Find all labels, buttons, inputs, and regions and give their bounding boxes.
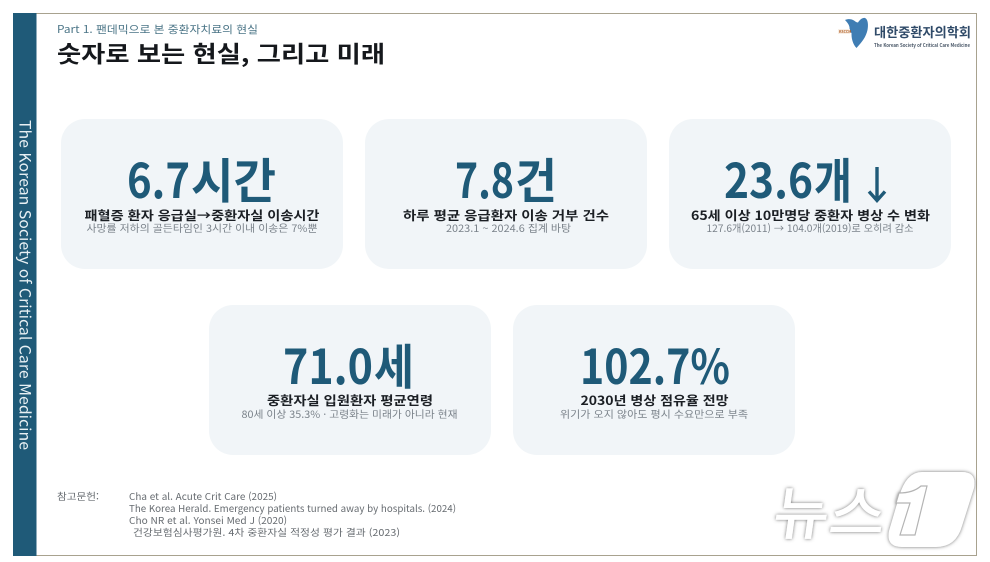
stat note: 사망률 저하의 골든타임인 3시간 이내 이송은 7%뿐 — [86, 220, 318, 235]
stat label: 65세 이상 10만명당 중환자 병상 수 변화 — [691, 205, 931, 224]
reference list: Cha et al. Acute Crit Care (2025) — [129, 489, 277, 503]
watermark text: 뉴스 — [769, 466, 893, 551]
panel: stat card 102.7% — [513, 305, 795, 455]
stat label: 2030년 병상 점유율 전망 — [580, 390, 729, 409]
panel: stat card 71.0세 — [209, 305, 491, 455]
watermark: News1 — [769, 466, 974, 551]
side bar title: The Korean Society of Critical Care Medicine — [14, 120, 36, 450]
stat label: 중환자실 입원환자 평균연령 — [267, 390, 433, 409]
reference list: The Korea Herald. Emergency patients turned away by hospitals. (2024) — [129, 501, 456, 515]
panel: stat card 7.8건 — [365, 119, 647, 269]
stat number: 6.7 — [127, 142, 190, 212]
stat note: 127.6개(2011) → 104.0개(2019)로 오히려 감소 — [706, 220, 914, 235]
stat number: 71.0 — [283, 328, 373, 398]
reference list: 건강보험심사평가원. 4차 중환자실 적정성 평가 결과 (2023) — [133, 525, 400, 539]
logo name: 대한중환자의학회 — [874, 22, 971, 41]
stat number: 세 — [374, 328, 414, 398]
stat label: 하루 평균 응급환자 이송 거부 건수 — [403, 205, 609, 224]
stat label: 패혈증 환자 응급실→중환자실 이송시간 — [84, 205, 320, 224]
panel: side bar — [13, 13, 36, 556]
logo: Korean Society of Critical Care Medicine — [838, 18, 971, 49]
stat number: 23.6 — [724, 142, 813, 212]
section label: Part 1. 팬데믹으로 본 중환자치료의 현실 — [57, 22, 258, 37]
stat note: 2023.1 ~ 2024.6 집계 바탕 — [446, 220, 571, 235]
icon: blue heart: KSCCM — [839, 30, 851, 35]
panel: stat card 6.7시간 — [61, 119, 343, 269]
stat number: 7.8 — [455, 142, 514, 212]
reference list — [129, 489, 456, 539]
stat number: 102.7% — [580, 328, 730, 398]
stat number: 시간 — [191, 142, 276, 212]
watermark logo — [889, 472, 974, 547]
panel: stat card 23.6개 — [669, 119, 951, 269]
references label: 참고문헌: — [57, 489, 99, 503]
stat number: 개 — [814, 142, 852, 212]
references — [57, 489, 456, 539]
reference list: Cho NR et al. Yonsei Med J (2020) — [129, 513, 287, 527]
stat note: 위기가 오지 않아도 평시 수요만으로 부족 — [560, 406, 748, 421]
stat number — [127, 142, 276, 212]
stat note: 80세 이상 35.3% · 고령화는 미래가 아니라 현재 — [242, 406, 458, 421]
stat number: 건 — [515, 142, 557, 212]
title: 숫자로 보는 현실, 그리고 미래 — [57, 35, 385, 69]
icon: down arrow — [869, 167, 885, 200]
logo subtitle: The Korean Society of Critical Care Medicine — [874, 42, 970, 49]
